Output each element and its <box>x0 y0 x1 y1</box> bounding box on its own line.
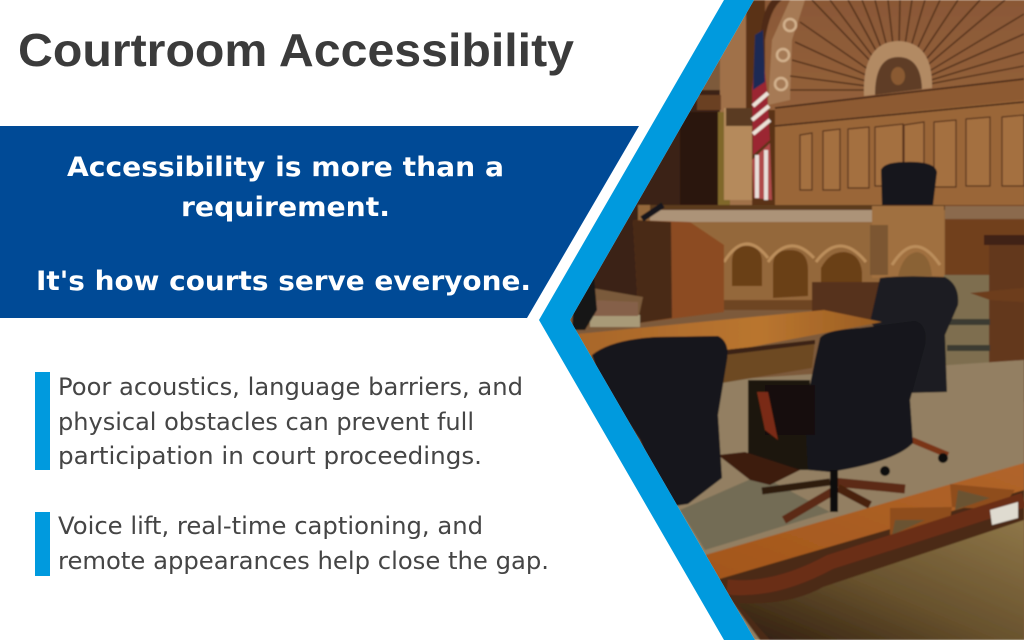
solutions text <box>58 512 549 575</box>
right wall below bench <box>945 205 1024 280</box>
banner line 3: It's how courts serve everyone. <box>36 266 531 297</box>
banner line 1: Accessibility is more than a <box>67 152 504 183</box>
judge bench <box>638 205 945 305</box>
left dark wall <box>593 90 720 296</box>
banner: key message <box>0 126 639 318</box>
bullet block: barriers <box>35 372 523 470</box>
front chair left <box>592 336 728 507</box>
solutions text: Voice lift, real-time captioning, and <box>58 512 483 540</box>
lectern <box>650 220 725 320</box>
rear chair <box>870 276 958 393</box>
right desk <box>988 245 1024 362</box>
table <box>577 310 882 356</box>
judge chair <box>881 162 937 205</box>
front bench rail <box>705 463 1024 580</box>
accent bar <box>35 372 50 470</box>
carpet <box>650 360 1024 640</box>
carved arch <box>864 41 932 96</box>
bullet block: solutions <box>35 512 549 576</box>
barriers text: participation in court proceedings. <box>58 442 482 470</box>
barriers text: physical obstacles can prevent full <box>58 408 474 436</box>
upholstery <box>737 520 1024 640</box>
front chair right <box>806 325 914 473</box>
title: Courtroom Accessibility <box>18 24 574 76</box>
upper wood sunburst <box>765 0 1024 110</box>
clerk desk <box>812 282 882 320</box>
moulding and panel wall <box>774 85 1024 126</box>
flag <box>752 30 772 200</box>
chevron: blue band <box>539 0 755 640</box>
chair base <box>833 482 905 489</box>
barriers text: Poor acoustics, language barriers, and <box>58 373 523 401</box>
accent bar <box>35 512 50 576</box>
banner line 2: requirement. <box>181 192 390 223</box>
small side step <box>594 288 644 314</box>
barriers text <box>58 373 523 470</box>
solutions text: remote appearances help close the gap. <box>58 547 549 575</box>
photo: courtroom <box>560 0 1024 640</box>
